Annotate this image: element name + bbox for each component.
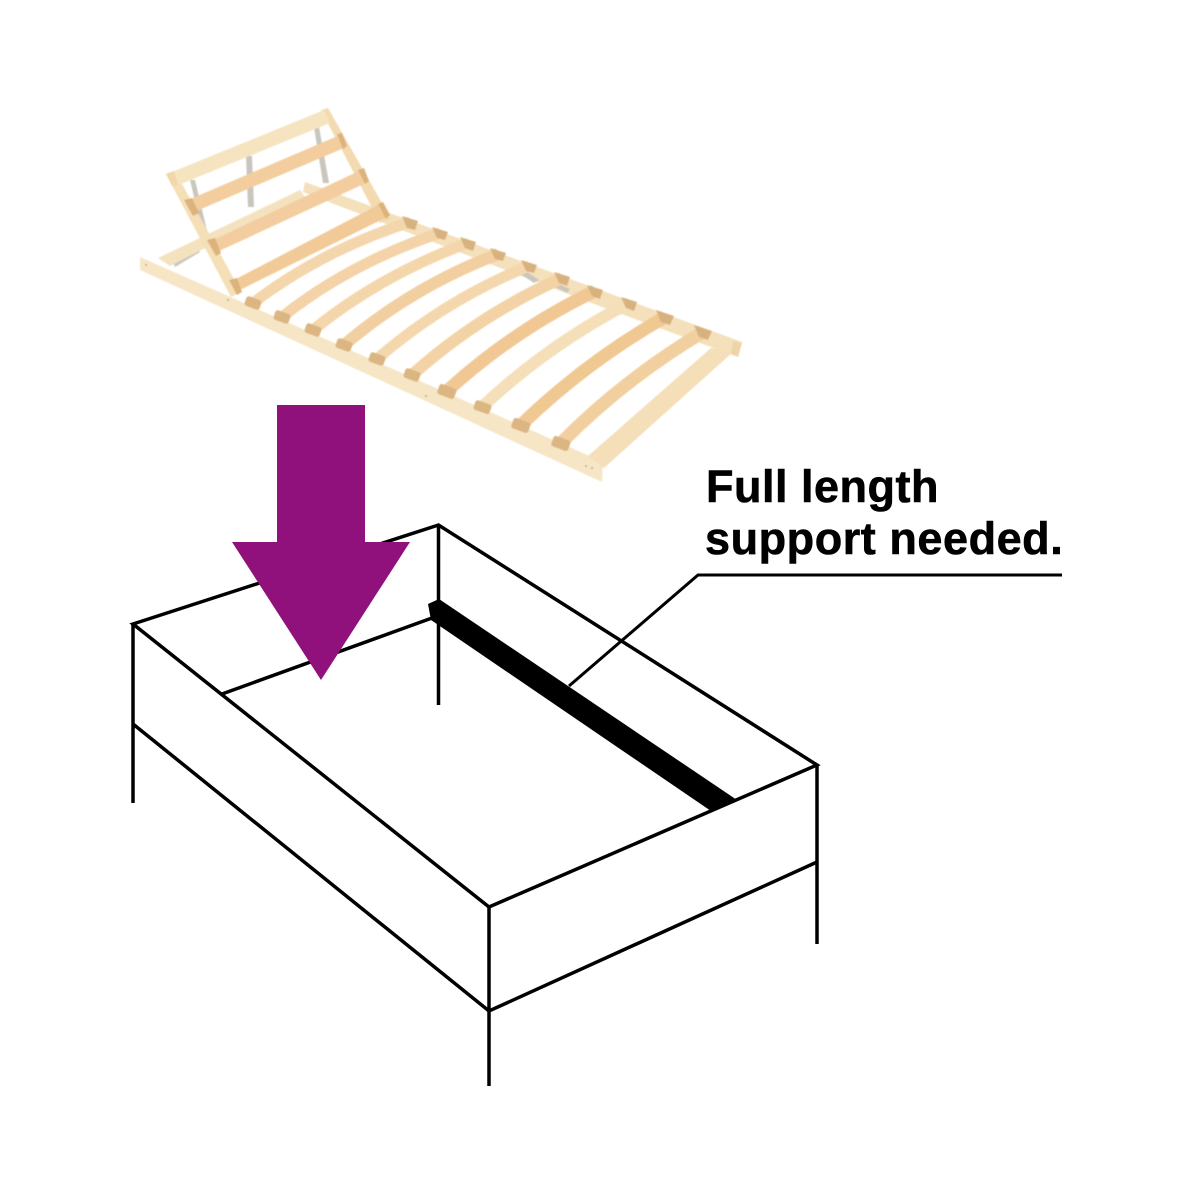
bed base outline xyxy=(133,525,817,1086)
front slat end blocks xyxy=(244,296,571,452)
lower edges xyxy=(133,724,817,1011)
corner posts xyxy=(131,623,135,803)
bed top rim xyxy=(133,525,817,907)
callout text: support needed. xyxy=(705,513,1063,564)
inner head edge xyxy=(222,618,432,694)
headrest slat blocks xyxy=(184,198,199,216)
headrest right leg xyxy=(321,108,391,223)
curved slats xyxy=(253,222,703,443)
callout leader line xyxy=(569,575,1062,686)
central support beam xyxy=(428,599,737,811)
callout text: Full length xyxy=(706,461,939,512)
hinge rail under headrest xyxy=(158,190,305,266)
slatted bed frame product xyxy=(140,108,742,482)
front rail xyxy=(140,257,603,482)
callout text xyxy=(705,461,1063,564)
headrest grey support brackets xyxy=(172,127,570,293)
back slat end blocks xyxy=(402,216,712,340)
purple down arrow xyxy=(232,405,410,680)
headrest top bar xyxy=(172,110,330,186)
rail rivets xyxy=(145,264,593,469)
headrest slats xyxy=(188,135,344,212)
headrest frame xyxy=(166,108,391,297)
end rail xyxy=(588,348,733,468)
back side rail xyxy=(303,182,742,357)
headrest left leg xyxy=(166,171,241,297)
